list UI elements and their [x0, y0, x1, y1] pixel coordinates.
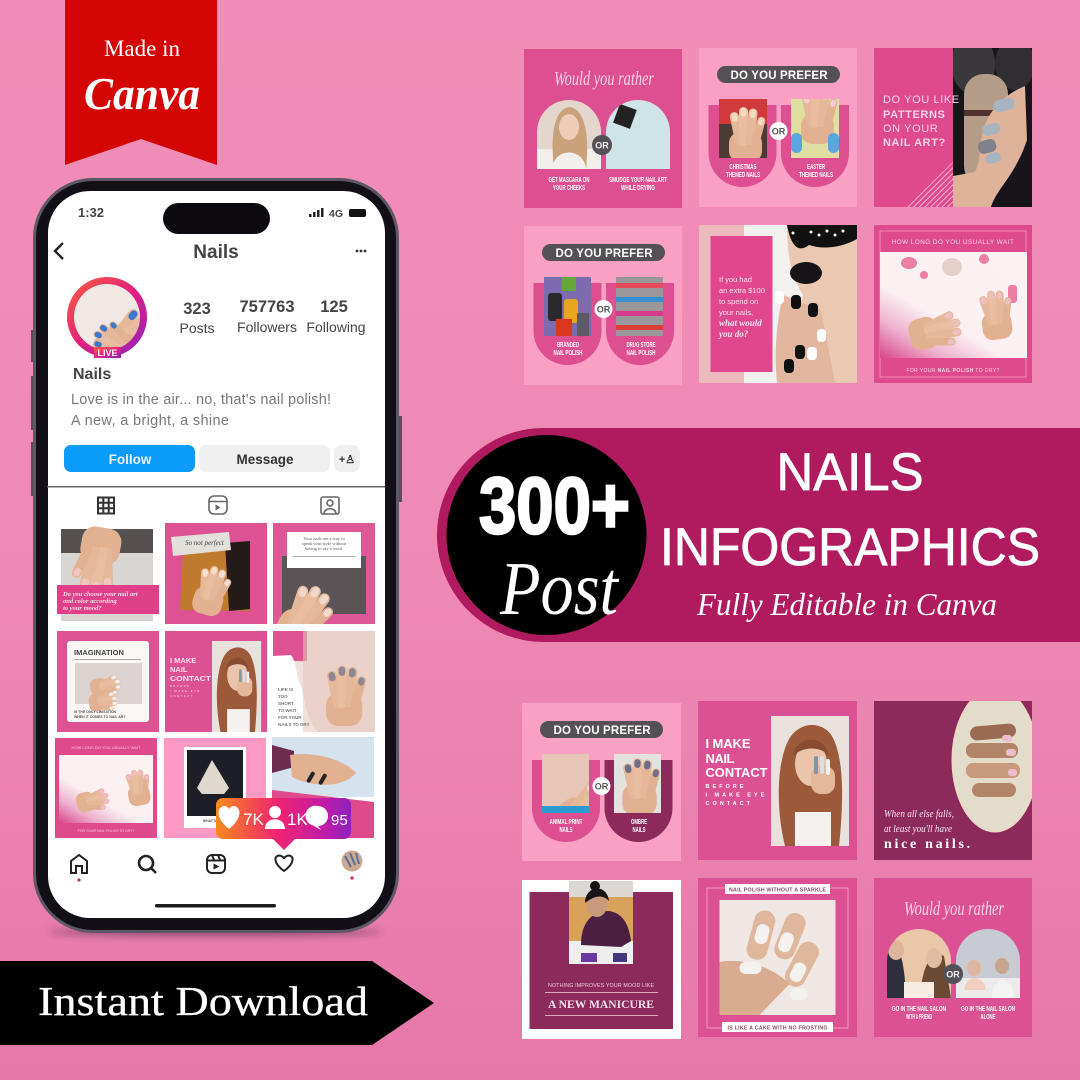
phone mockup: [31, 178, 402, 936]
tile: do you prefer christmas or easter: THEMED NAILS: [799, 172, 833, 179]
nav avatar: [342, 850, 362, 880]
feed post: too short: FOR YOUR: [278, 715, 302, 720]
feed post: how long: [55, 738, 157, 838]
tile: do you prefer animal print or ombre: NAILS: [632, 827, 646, 834]
tile: do you prefer christmas or easter: CHRISTMAS: [730, 164, 757, 171]
feed post: quote: Your nails are a way to: [303, 536, 345, 541]
ribbon: made in canva: Made in: [104, 36, 180, 61]
badge count: 300+: [479, 461, 630, 550]
tile: do you prefer christmas or easter: [699, 48, 857, 207]
tile: nice nails: When all else falls,: [884, 808, 954, 820]
feed post: imagination: IMAGINATION: [74, 648, 124, 657]
tile: a new manicure: NOTHING IMPROVES YOUR MOOD LIKE: [548, 983, 654, 989]
tile: do you prefer branded or drug store: DRUG STORE: [626, 342, 656, 349]
feed post: torn photo: [165, 523, 267, 624]
tile: would you rather salon: GO IN THE NAIL SALON: [961, 1006, 1015, 1013]
profile stats: 757763: [239, 298, 295, 316]
tile: do you prefer animal print or ombre: OMBRE: [631, 819, 647, 826]
tile: nice nails: at least you'll have: [884, 823, 952, 835]
tile: i make nail contact: CONTACT: [706, 765, 768, 780]
feed post: too short: TO WAIT: [278, 708, 297, 713]
tile: do you like patterns: PATTERNS: [883, 109, 945, 121]
feed post: nail contact: NAIL: [170, 665, 188, 674]
phone status bar: 4G: [329, 208, 343, 220]
tile: nail polish without a sparkle: [698, 878, 857, 1037]
profile stats: Posts: [179, 320, 215, 336]
profile stats: Following: [306, 319, 366, 335]
feed post: nail contact: I MAKE: [170, 656, 196, 665]
phone status bar: 1:32: [78, 205, 104, 220]
banner heading: INFOGRAPHICS: [660, 518, 1040, 577]
tile: do you prefer animal print or ombre: NAILS: [560, 827, 573, 834]
profile buttons: [64, 445, 360, 472]
tile: do you prefer animal print or ombre: DO YOU PREFER: [554, 725, 651, 737]
tile: do you prefer branded or drug store: [524, 226, 682, 385]
feed post: nail contact: BEFORE: [170, 684, 191, 688]
tile: would you rather mascara: SMUDGE YOUR NAIL ART: [609, 177, 667, 184]
feed post: quote: [273, 523, 375, 624]
phone status bar: [78, 203, 366, 234]
feed post: imagination: IS THE ONLY LIMITATION: [74, 710, 117, 714]
feed post: nail contact: CONTACT: [170, 694, 194, 698]
tile: how long do you usually wait: [874, 225, 1032, 383]
tile: do you like patterns: DO YOU LIKE: [883, 94, 960, 106]
instant download arrow banner: [0, 961, 434, 1045]
feed post: nail contact: [165, 631, 267, 732]
tile: nice nails: nice nails.: [884, 837, 973, 852]
feed post: hand on blue: [272, 737, 374, 838]
tile: would you rather mascara: YOUR CHEEKS: [553, 185, 585, 192]
feed post: imagination: WHEN IT COMES TO NAIL ART: [74, 715, 126, 719]
tile: nail polish without a sparkle: NAIL POLISH WITHOUT A SPARKLE: [729, 888, 826, 894]
feed post: imagination: [57, 631, 159, 732]
icon: heart: [275, 856, 293, 871]
tile: do you like patterns: NAIL ART?: [883, 137, 946, 149]
tile: do you prefer christmas or easter: EASTER: [807, 164, 825, 171]
engagement notification bubble: 7K: [243, 810, 264, 829]
feed post: nail mood: and color according: [63, 598, 118, 605]
tile: i make nail contact: NAIL: [706, 751, 735, 766]
tile: would you rather salon: GO IN THE NAIL SALON: [892, 1006, 946, 1013]
profile bio: Nails: [73, 366, 111, 383]
tile: i make nail contact: I MAKE: [706, 736, 751, 751]
feed post: nail contact: CONTACT: [170, 674, 211, 683]
profile header: [55, 242, 366, 263]
phone bottom navigation: [71, 850, 362, 908]
tile: extra 100 dollars: what would: [719, 318, 762, 328]
feed post: nail mood: Do you choose your nail art: [62, 591, 138, 598]
feed post: how long: FOR YOUR NAIL POLISH TO DRY?: [78, 829, 134, 833]
tile: would you rather salon: OR: [946, 970, 960, 980]
profile stats: 323: [183, 300, 211, 318]
tile: i make nail contact: I MAKE EYE: [706, 792, 767, 798]
tile: would you rather mascara: Would you rather: [554, 68, 654, 90]
tile: do you prefer animal print or ombre: OR: [595, 782, 609, 792]
tile: nail polish without a sparkle: IS LIKE A CAKE WITH NO FROSTING: [728, 1026, 828, 1032]
tile: would you rather mascara: GET MASCARA ON: [548, 177, 590, 184]
ribbon: made in canva: Canva: [84, 68, 200, 119]
tile: do you like patterns: [874, 34, 1035, 207]
tile: do you prefer branded or drug store: OR: [597, 304, 611, 314]
tile: do you prefer christmas or easter: THEMED NAILS: [726, 172, 760, 179]
icon: person: [265, 806, 285, 829]
tile: i make nail contact: [698, 701, 857, 860]
tile: do you prefer branded or drug store: NAIL POLISH: [626, 350, 656, 357]
feed post: fashion photo: [164, 738, 266, 838]
feed post: nail mood: to your mood?: [63, 605, 102, 612]
icon: heart: [219, 806, 239, 829]
tile: extra 100 dollars: you do?: [718, 329, 749, 339]
feed post: how long: HOW LONG DO YOU USUALLY WAIT: [72, 745, 141, 750]
tile: do you prefer branded or drug store: DO YOU PREFER: [556, 248, 653, 260]
engagement notification bubble: 1K: [287, 810, 308, 829]
icon: reels: [207, 855, 225, 873]
feed post: nail contact: I MAKE EYE: [170, 689, 201, 693]
feed post: too short: TOO: [278, 694, 288, 699]
instant download arrow banner: Instant Download: [38, 978, 368, 1024]
engagement notification bubble: [216, 798, 351, 850]
feed post: quote: having to say a word.: [305, 546, 343, 551]
tile: do you prefer christmas or easter: DO YOU PREFER: [730, 70, 828, 82]
tile: would you rather salon: WITH A FRIEND: [906, 1014, 932, 1021]
icon: comment: [305, 806, 328, 830]
tile: a new manicure: [522, 880, 681, 1039]
tile: extra 100 dollars: your nails,: [719, 308, 753, 317]
feed post: too short: [273, 631, 375, 732]
tile: would you rather salon: ALONE: [980, 1014, 996, 1021]
tile: do you prefer branded or drug store: NAIL POLISH: [554, 350, 582, 357]
ribbon: made in canva: [65, 0, 217, 165]
banner heading: NAILS: [776, 443, 924, 502]
profile bio: [71, 366, 331, 429]
tile: i make nail contact: BEFORE: [706, 784, 746, 790]
tile: do you prefer animal print or ombre: [522, 703, 681, 861]
banner subtitle: Fully Editable in Canva: [696, 586, 997, 622]
profile avatar with live ring: LIVE: [97, 348, 118, 358]
profile stats: Followers: [237, 319, 297, 335]
profile stats: [179, 298, 366, 336]
tile: extra 100 dollars: an extra $100: [719, 286, 765, 295]
profile bio: A new, a bright, a shine: [71, 413, 229, 429]
tile: do you prefer animal print or ombre: ANIMAL PRINT: [550, 819, 583, 826]
banner heading: [660, 443, 1040, 577]
tile: would you rather salon: Would you rather: [904, 898, 1004, 920]
profile buttons: Follow: [109, 452, 152, 467]
profile buttons: Message: [236, 452, 294, 467]
feed post: torn photo: So not perfect: [185, 539, 225, 547]
profile buttons: +♙: [339, 454, 355, 466]
tile: nice nails: [874, 688, 1038, 860]
feed post: nail mood: [57, 526, 159, 621]
center banner: 300+ post: [437, 428, 1080, 642]
tile: would you rather mascara: [524, 49, 682, 208]
profile stats: 125: [320, 298, 348, 316]
tile: how long do you usually wait: FOR YOUR NAIL POLISH TO DRY?: [906, 368, 1000, 374]
icon: search: [139, 856, 156, 873]
icon: home: [71, 855, 87, 873]
tile: a new manicure: A NEW MANICURE: [548, 997, 654, 1011]
profile header: Nails: [193, 242, 239, 263]
feed post: fashion photo: WHAT'S YOUR: [203, 819, 228, 823]
tile: do you prefer branded or drug store: BRANDED: [557, 342, 579, 349]
tile: do you prefer christmas or easter: OR: [772, 126, 786, 136]
tile: how long do you usually wait: HOW LONG DO YOU USUALLY WAIT: [892, 239, 1014, 246]
badge circle: [446, 435, 646, 635]
feed post: too short: NAILS TO DRY: [278, 722, 310, 727]
tile: do you like patterns: ON YOUR: [883, 123, 938, 135]
feed post: too short: SHORT: [278, 701, 294, 706]
engagement notification bubble: 95: [331, 812, 348, 829]
tile: i make nail contact: CONTACT: [706, 801, 753, 807]
feed post: too short: LIFE IS: [278, 687, 293, 692]
tile: extra 100 dollars: If you had: [719, 275, 752, 284]
tile: would you rather salon: [874, 878, 1032, 1037]
feed post: quote: speak your style without: [302, 541, 347, 546]
tile: would you rather mascara: WHILE DRYING: [621, 185, 655, 192]
tile: would you rather mascara: OR: [595, 140, 609, 150]
tile: extra 100 dollars: [699, 225, 857, 383]
badge label: Post: [499, 547, 620, 631]
profile tab icons: [98, 496, 339, 514]
tile: extra 100 dollars: to spend on: [719, 297, 758, 306]
profile bio: Love is in the air... no, that's nail polish!: [71, 392, 331, 408]
profile avatar with live ring: [67, 277, 147, 358]
